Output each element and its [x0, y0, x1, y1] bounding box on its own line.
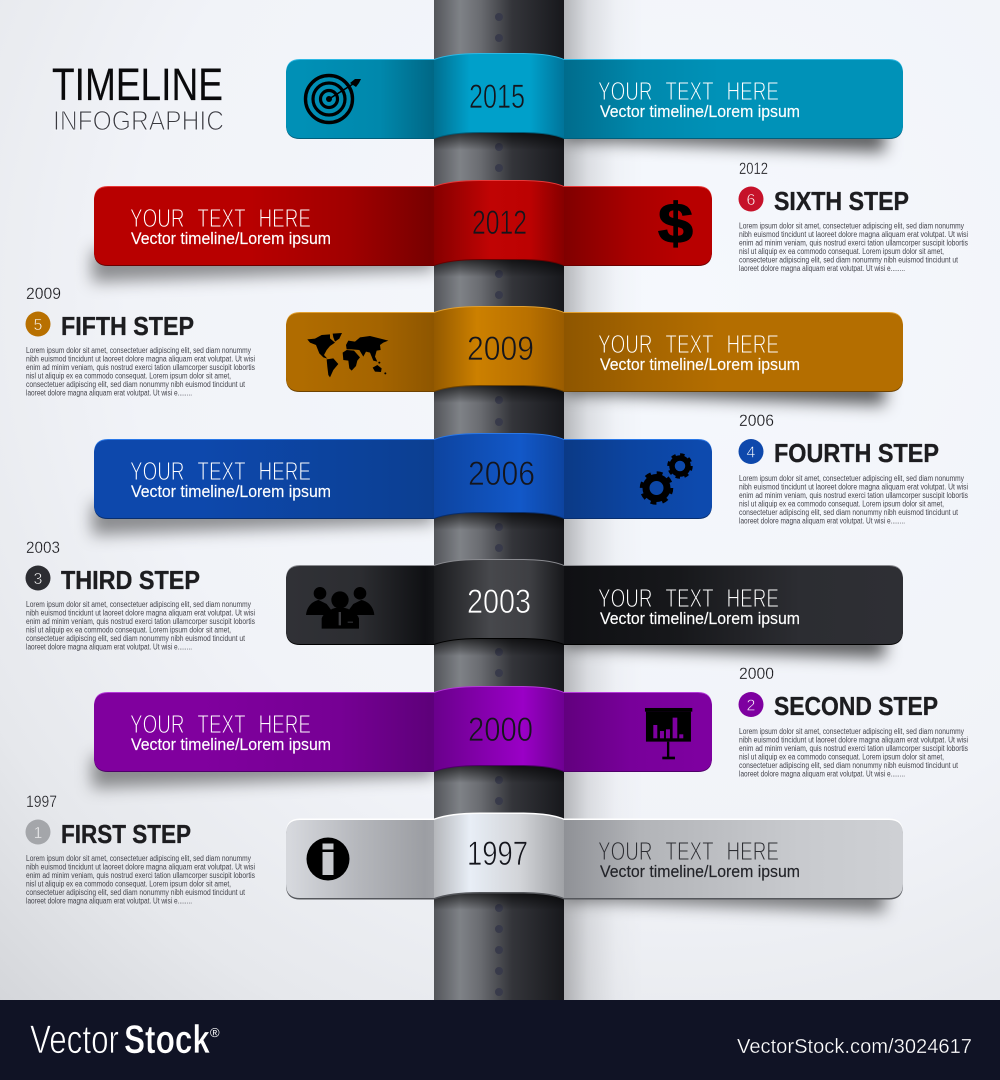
step: sixth — [738, 159, 968, 273]
step: third: Lorem ipsum dolor sit amet, consectetuer adipiscing elit, sed diam nonummy — [26, 600, 251, 609]
footer bar — [0, 1000, 1000, 1080]
step: sixth: 2012 — [739, 159, 768, 178]
ribbon text: Vector timeline/Lorem ipsum — [131, 483, 331, 501]
step: first: nisl ut aliquip ex ea commodo consequat. Lorem ipsum dolor sit amet, — [26, 880, 231, 888]
step: second: 2000 — [739, 664, 774, 683]
step: fourth: 2006 — [739, 411, 774, 430]
ribbon text: Vector timeline/Lorem ipsum — [600, 863, 800, 881]
step: sixth: laoreet dolore magna aliquam erat volutpat. Ut wisi e........ — [739, 264, 905, 273]
icon: people — [306, 587, 374, 629]
central pole — [434, 0, 564, 1000]
pole side shadow — [564, 0, 644, 1000]
step: first — [26, 792, 255, 906]
step: third: nibh euismod tincidunt ut laoreet dolore magna aliquam erat volutpat. Ut wisi — [26, 608, 255, 618]
step: fifth: 2009 — [26, 284, 61, 303]
ribbon text — [598, 329, 800, 374]
step: third: nisl ut aliquip ex ea commodo consequat. Lorem ipsum dolor sit amet, — [26, 626, 231, 634]
step: sixth: consectetuer adipiscing elit, sed diam nonummy nibh euismod tincidunt ut — [739, 256, 959, 264]
step: third: laoreet dolore magna aliquam erat volutpat. Ut wisi e........ — [26, 642, 192, 652]
step: third: THIRD STEP — [61, 565, 200, 595]
ribbon 2000 — [94, 686, 712, 772]
step: second: 2 — [747, 698, 756, 714]
ribbon text — [130, 456, 331, 501]
ribbon text: YOUR TEXT HERE — [598, 329, 779, 359]
year: 2003 — [467, 583, 531, 621]
footer url: VectorStock.com/3024617 — [737, 1036, 972, 1058]
step: first: laoreet dolore magna aliquam erat volutpat. Ut wisi e........ — [26, 896, 192, 906]
year: 2015 — [469, 78, 525, 116]
title — [52, 59, 224, 136]
step: sixth: nisl ut aliquip ex ea commodo consequat. Lorem ipsum dolor sit amet, — [739, 247, 944, 256]
ribbon text: YOUR TEXT HERE — [130, 203, 311, 233]
step: sixth: 6 — [747, 192, 756, 209]
step: fifth: nibh euismod tincidunt ut laoreet dolore magna aliquam erat volutpat. Ut wisi — [26, 354, 255, 364]
step: fourth: nisl ut aliquip ex ea commodo consequat. Lorem ipsum dolor sit amet, — [739, 500, 944, 508]
ribbon text — [130, 203, 331, 248]
footer logo — [30, 1018, 220, 1062]
year: 2009 — [467, 330, 534, 368]
ribbon text: YOUR TEXT HERE — [130, 709, 311, 739]
step: first: consectetuer adipiscing elit, sed diam nonummy nibh euismod tincidunt ut — [26, 888, 246, 897]
step: first: Lorem ipsum dolor sit amet, consectetuer adipiscing elit, sed diam nonummy — [26, 854, 251, 863]
ribbon text — [598, 76, 800, 121]
step: fourth — [738, 411, 968, 526]
icon: world map — [307, 333, 388, 377]
ribbon 2003 — [286, 559, 903, 645]
ribbon text: YOUR TEXT HERE — [598, 836, 779, 866]
step: first: nibh euismod tincidunt ut laoreet dolore magna aliquam erat volutpat. Ut wisi — [26, 862, 255, 872]
step: fourth: laoreet dolore magna aliquam erat volutpat. Ut wisi e........ — [739, 516, 905, 526]
step: second: nisl ut aliquip ex ea commodo consequat. Lorem ipsum dolor sit amet, — [739, 752, 944, 762]
footer logo: Vector — [30, 1018, 119, 1062]
ribbon text: Vector timeline/Lorem ipsum — [131, 230, 331, 248]
ribbon text: Vector timeline/Lorem ipsum — [600, 103, 800, 121]
step: fifth: Lorem ipsum dolor sit amet, consectetuer adipiscing elit, sed diam nonummy — [26, 346, 251, 355]
ribbon text — [130, 709, 331, 754]
ribbon text: Vector timeline/Lorem ipsum — [600, 356, 800, 374]
ribbon 2009 — [286, 306, 903, 392]
step: fifth: laoreet dolore magna aliquam erat volutpat. Ut wisi e........ — [26, 388, 192, 398]
ribbon text: YOUR TEXT HERE — [598, 583, 779, 613]
year: 2012 — [472, 204, 527, 242]
ribbon text: YOUR TEXT HERE — [130, 456, 311, 486]
footer logo: ® — [210, 1025, 220, 1040]
ribbon text — [598, 836, 800, 881]
ribbon text: Vector timeline/Lorem ipsum — [131, 736, 331, 754]
step: fifth: 5 — [34, 317, 43, 334]
step: second — [738, 664, 968, 778]
step: third: 3 — [34, 571, 43, 588]
step: fourth: 4 — [747, 444, 756, 462]
step: third: enim ad minim veniam, quis nostrud exerci tation ullamcorper suscipit lobortis — [26, 617, 255, 626]
icon: info — [306, 838, 350, 880]
ribbon text — [598, 583, 800, 628]
ribbon 2006 — [94, 433, 712, 519]
title: TIMELINE — [52, 59, 223, 110]
step: fifth: FIFTH STEP — [61, 311, 194, 341]
year: 2000 — [468, 711, 533, 749]
step: fourth: consectetuer adipiscing elit, sed diam nonummy nibh euismod tincidunt ut — [739, 508, 959, 517]
icon: gears — [642, 455, 691, 502]
step: third: consectetuer adipiscing elit, sed diam nonummy nibh euismod tincidunt ut — [26, 634, 246, 643]
step: third: 2003 — [26, 538, 60, 557]
step: first: enim ad minim veniam, quis nostrud exerci tation ullamcorper suscipit lobortis — [26, 871, 255, 880]
step: second: consectetuer adipiscing elit, sed diam nonummy nibh euismod tincidunt ut — [739, 761, 959, 770]
step: first: 1 — [34, 825, 43, 842]
ribbon text: YOUR TEXT HERE — [598, 76, 779, 106]
shadows under bands on the pole — [434, 130, 564, 910]
step: first: 1997 — [26, 792, 57, 811]
step: fifth: enim ad minim veniam, quis nostrud exerci tation ullamcorper suscipit lobortis — [26, 363, 255, 372]
ribbon 1997 — [286, 812, 903, 900]
step: fifth — [26, 284, 255, 398]
step: fifth: nisl ut aliquip ex ea commodo consequat. Lorem ipsum dolor sit amet, — [26, 372, 231, 380]
icon: target — [306, 76, 361, 122]
step: fourth: FOURTH STEP — [774, 438, 939, 468]
step: fifth: consectetuer adipiscing elit, sed diam nonummy nibh euismod tincidunt ut — [26, 380, 246, 389]
year: 2006 — [468, 455, 535, 493]
step: first: FIRST STEP — [61, 819, 191, 849]
title: INFOGRAPHIC — [53, 105, 224, 136]
step: third — [26, 538, 255, 652]
step: sixth: SIXTH STEP — [774, 186, 909, 216]
footer logo: Stock — [124, 1018, 211, 1062]
ribbon 2012 — [94, 180, 712, 266]
year: 1997 — [467, 835, 528, 873]
ribbon text: Vector timeline/Lorem ipsum — [600, 610, 800, 628]
icon: dollar: $ — [658, 192, 693, 256]
step: second: SECOND STEP — [774, 691, 938, 721]
ribbon 2015 — [286, 53, 903, 139]
icon: presentation board — [645, 708, 692, 759]
step: second: laoreet dolore magna aliquam erat volutpat. Ut wisi e........ — [739, 770, 905, 778]
pole dots — [495, 13, 503, 996]
ribbon drop shadows — [92, 125, 885, 912]
